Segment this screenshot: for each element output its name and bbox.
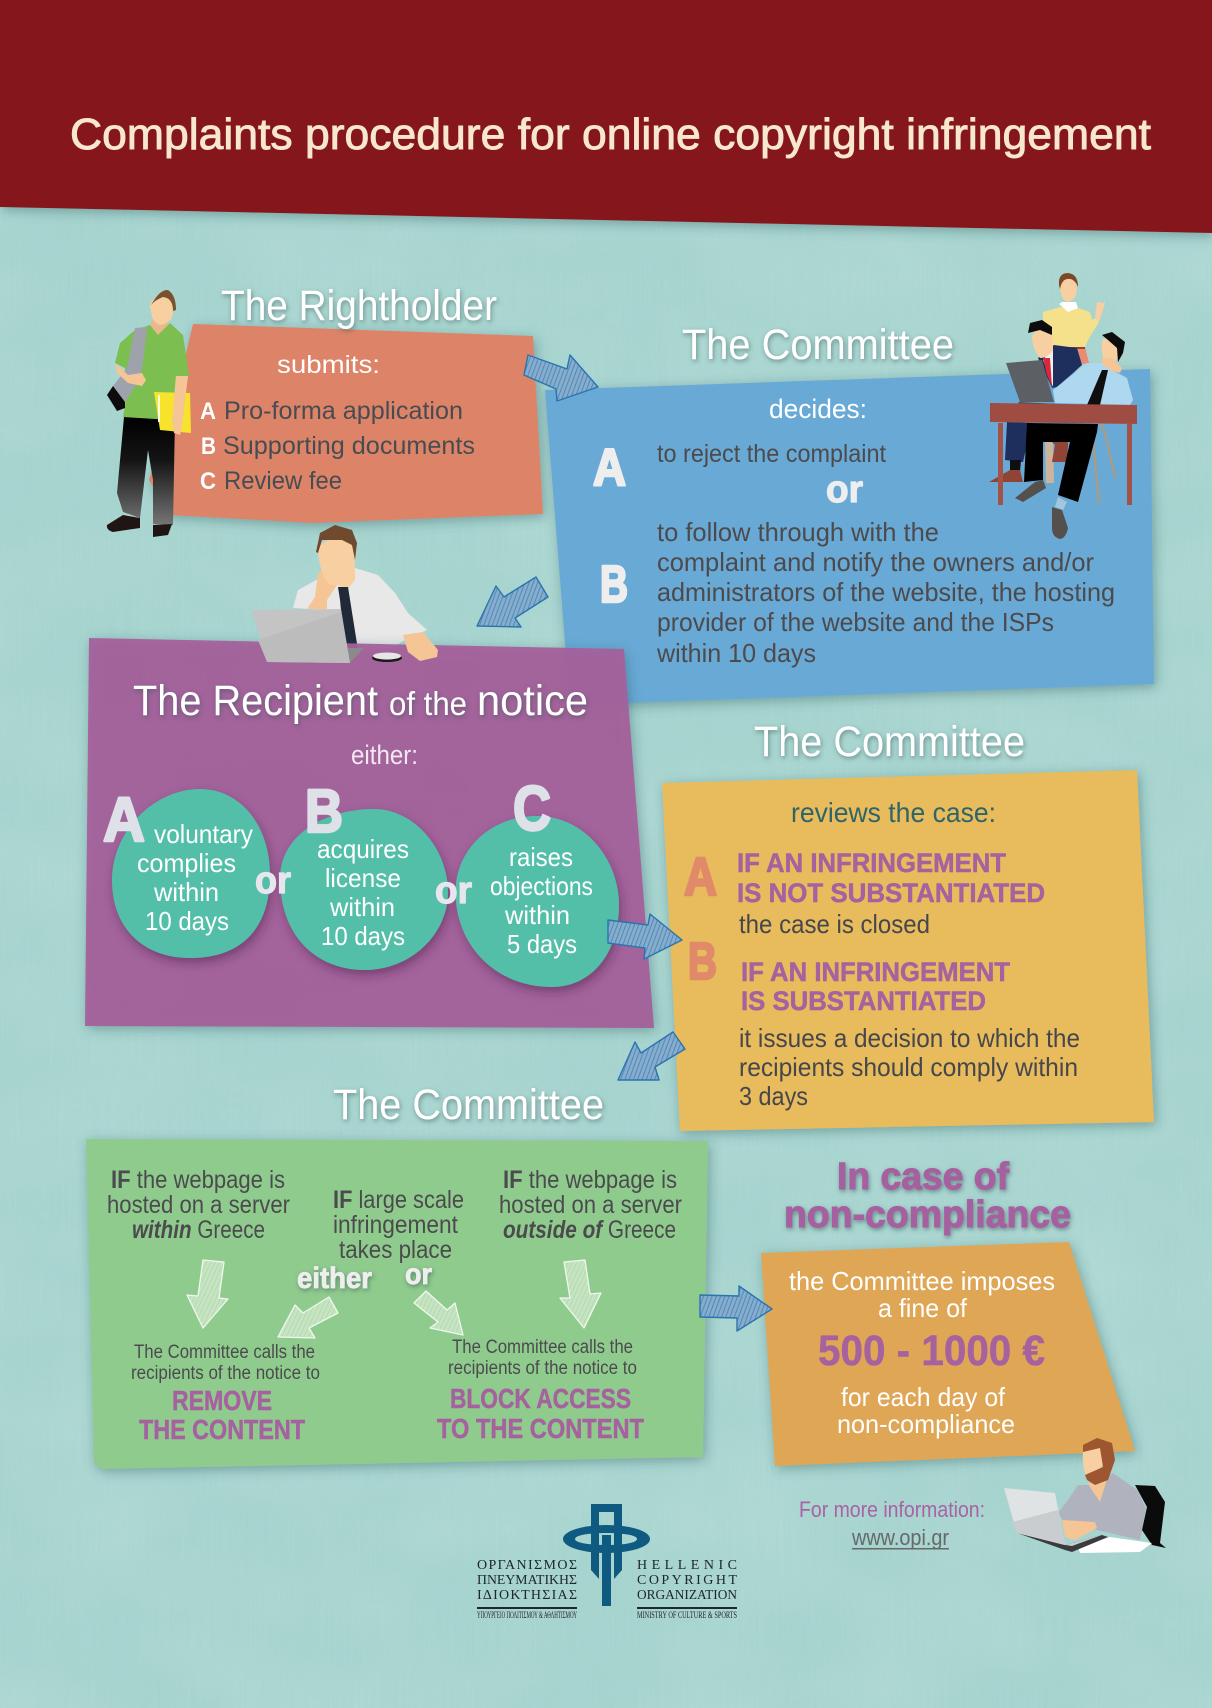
icon: rightholder standing with folder: [107, 290, 191, 537]
word: or: or: [405, 1258, 432, 1291]
title: Complaints procedure for online copyright infringement: [70, 110, 1151, 159]
text: committee imposes a fine: a fine of: [878, 1293, 968, 1323]
option C: raises objections: objections: [490, 871, 593, 901]
logo: Hellenic Copyright Organization: ΥΠΟΥΡΓΕΙΟ ΠΟΛΙΤΙΣΜΟΥ & ΑΘΛΗΤΙΣΜΟΥ: [477, 1610, 577, 1620]
arrow: within Greece down: [187, 1260, 228, 1328]
panel: the rightholder: [149, 282, 543, 523]
arrow: actions to fine: [700, 1286, 772, 1331]
arrow: rightholder to committee: [524, 355, 598, 401]
heading: the recipient of the notice: The Recipient: [133, 677, 378, 725]
heading: the committee actions: The Committee: [333, 1081, 604, 1129]
heading: the committee reviews: The Committee: [754, 718, 1025, 766]
text: large scale infringement: [333, 1186, 464, 1264]
text: hosted within Greece: hosted on a server: [107, 1191, 290, 1219]
list: documents submitted: Pro-forma application: [224, 397, 463, 425]
option A: voluntary compliance: voluntary: [154, 819, 253, 849]
heading: in case of non-compliance: In case of: [837, 1156, 1009, 1198]
option C: raises objections: raises: [509, 842, 573, 872]
panel: the committee reviews: [662, 770, 1154, 1131]
arrow: committee to recipient: [477, 577, 548, 627]
letter: B: B: [600, 556, 628, 614]
text: remove the content: THE CONTENT: [139, 1414, 305, 1445]
logo: Hellenic Copyright Organization: [477, 1504, 737, 1620]
outcome A: IF AN INFRINGEMENT: [737, 848, 1006, 878]
header banner: [0, 0, 1212, 233]
word: or: or: [826, 469, 863, 511]
option B: acquires license: license: [325, 863, 401, 893]
logo: Hellenic Copyright Organization: ORGANIZATION: [637, 1588, 737, 1603]
text: more information link: For more information:: [799, 1497, 985, 1522]
panel: the recipient of the notice: [85, 638, 654, 1028]
heading: in case of non-compliance: [784, 1156, 1071, 1236]
outcome A: [737, 848, 1045, 939]
amount of fine: 500 - 1000 €: [818, 1327, 1045, 1375]
text: large scale infringement: takes place: [339, 1236, 452, 1264]
outcome B: it issues a decision to which the: [739, 1023, 1080, 1053]
arrow: recipient to committee review: [608, 914, 682, 959]
panel: fine: [761, 1242, 1135, 1466]
option C: raises objections: [456, 774, 619, 987]
heading: in case of non-compliance: non-compliance: [784, 1194, 1071, 1236]
option B: acquires license: 10 days: [321, 921, 405, 951]
option B text: [656, 517, 1115, 668]
word: or (first): or: [255, 860, 291, 902]
list: documents submitted: Supporting documents: [223, 432, 475, 460]
text: more information link: www.opi.gr: [851, 1525, 949, 1550]
logo: Hellenic Copyright Organization: ΙΔΙΟΚΤΗΣΙΑΣ: [477, 1588, 577, 1603]
text: more information link: [799, 1497, 985, 1550]
letter: A: A: [593, 439, 626, 497]
icon: recipient behind desk: [293, 525, 427, 650]
outcome A: IS NOT SUBSTANTIATED: [737, 878, 1045, 908]
logo: Hellenic Copyright Organization: COPYRIGHT: [637, 1573, 737, 1588]
list: documents submitted: [200, 397, 475, 495]
logo: Hellenic Copyright Organization: HELLENIC: [637, 1558, 737, 1573]
text: block access to the content: [437, 1337, 644, 1444]
heading: the committee decides: The Committee: [682, 321, 954, 369]
arrow: or down right: [414, 1291, 463, 1335]
icon: man working on laptop: [1004, 1438, 1166, 1553]
text: hosted outside Greece: hosted on a server: [499, 1191, 682, 1219]
logo: Hellenic Copyright Organization: MINISTRY OF CULTURE & SPORTS: [637, 1610, 737, 1620]
icon: laptop, mouse and hand: [252, 609, 438, 663]
text: hosted outside Greece: [499, 1166, 682, 1244]
list: documents submitted: A: [200, 398, 216, 425]
text: block access to the content: recipients of the notice to: [448, 1358, 637, 1379]
arrow: outside Greece down: [560, 1260, 601, 1328]
list: documents submitted: Review fee: [224, 467, 342, 495]
option B text: administrators of the website, the hosting: [657, 577, 1115, 607]
list: documents submitted: B: [201, 433, 216, 460]
heading: the rightholder: The Rightholder: [221, 282, 497, 330]
option A: voluntary compliance: [103, 785, 270, 958]
text: per day: non-compliance: [837, 1409, 1015, 1439]
option A: voluntary compliance: within: [153, 877, 219, 907]
option B: acquires license: within: [329, 892, 395, 922]
option A: voluntary compliance: 10 days: [145, 906, 229, 936]
word: either: either: [297, 1262, 372, 1295]
list: documents submitted: C: [200, 468, 216, 495]
text: submits: submits:: [277, 351, 380, 379]
option C: raises objections: C: [513, 774, 551, 844]
outcome B: IF AN INFRINGEMENT: [741, 957, 1010, 987]
text: block access to the content: The Committee calls the: [452, 1337, 633, 1358]
text: hosted outside Greece: outside of Greece: [503, 1216, 676, 1244]
text: per day: [837, 1382, 1015, 1439]
text: remove the content: recipients of the notice to: [131, 1363, 320, 1384]
text: hosted outside Greece: IF the webpage is: [503, 1166, 677, 1194]
text: remove the content: The Committee calls the: [134, 1342, 315, 1363]
text: block access to the content: TO THE CONTENT: [437, 1413, 644, 1444]
outcome B: 3 days: [739, 1081, 808, 1111]
text: large scale infringement: IF large scale: [333, 1186, 464, 1214]
text: hosted within Greece: [107, 1166, 290, 1244]
option A: voluntary compliance: complies: [137, 848, 236, 878]
outcome A: the case is closed: [739, 909, 930, 939]
option C: raises objections: 5 days: [507, 929, 577, 959]
option B text: complaint and notify the owners and/or: [657, 547, 1094, 577]
outcome B: recipients should comply within: [739, 1052, 1078, 1082]
logo: Hellenic Copyright Organization: ΟΡΓΑΝΙΣΜΟΣ: [477, 1558, 577, 1573]
text: committee imposes a fine: [789, 1266, 1055, 1323]
option A text: to reject the complaint: [657, 440, 886, 468]
panel: the committee decides: [545, 369, 1154, 705]
text: reviews the case: reviews the case:: [791, 797, 996, 828]
outcome B: [739, 957, 1080, 1111]
arrow: review to committee actions: [618, 1032, 685, 1080]
text: large scale infringement: infringement: [333, 1211, 458, 1239]
letter: A: A: [684, 847, 717, 907]
option C: raises objections: within: [504, 900, 570, 930]
option B text: within 10 days: [656, 638, 816, 668]
icon: committee members at a table: [989, 273, 1137, 539]
outcome B: IS SUBSTANTIATED: [741, 986, 986, 1016]
option B: acquires license: acquires: [317, 834, 409, 864]
heading: the recipient of the notice: of the: [389, 685, 467, 722]
heading: the recipient of the notice: [133, 677, 588, 725]
option B: acquires license: [280, 777, 448, 970]
text: remove the content: [131, 1342, 320, 1445]
text: block access to the content: BLOCK ACCESS: [450, 1383, 631, 1414]
text: hosted within Greece: IF the webpage is: [111, 1166, 285, 1194]
text: per day: for each day of: [841, 1382, 1006, 1412]
heading: the recipient of the notice: notice: [477, 677, 588, 725]
logo: Hellenic Copyright Organization: ΠΝΕΥΜΑΤΙΚΗΣ: [477, 1573, 577, 1588]
text: committee imposes a fine: the Committee imposes: [789, 1266, 1055, 1296]
word: or (second): or: [435, 870, 472, 912]
text: hosted within Greece: within Greece: [132, 1216, 265, 1244]
option B: acquires license: B: [305, 777, 343, 845]
option B text: to follow through with the: [657, 517, 939, 547]
option A: voluntary compliance: A: [103, 785, 145, 855]
letter: B: B: [688, 933, 717, 991]
panel: the committee actions: [86, 1139, 708, 1469]
arrow: either down left: [278, 1297, 338, 1338]
option B text: provider of the website and the ISPs: [657, 607, 1054, 637]
text: remove the content: REMOVE: [172, 1385, 272, 1416]
text: either: either:: [351, 740, 418, 770]
text: decides: decides:: [769, 394, 867, 424]
